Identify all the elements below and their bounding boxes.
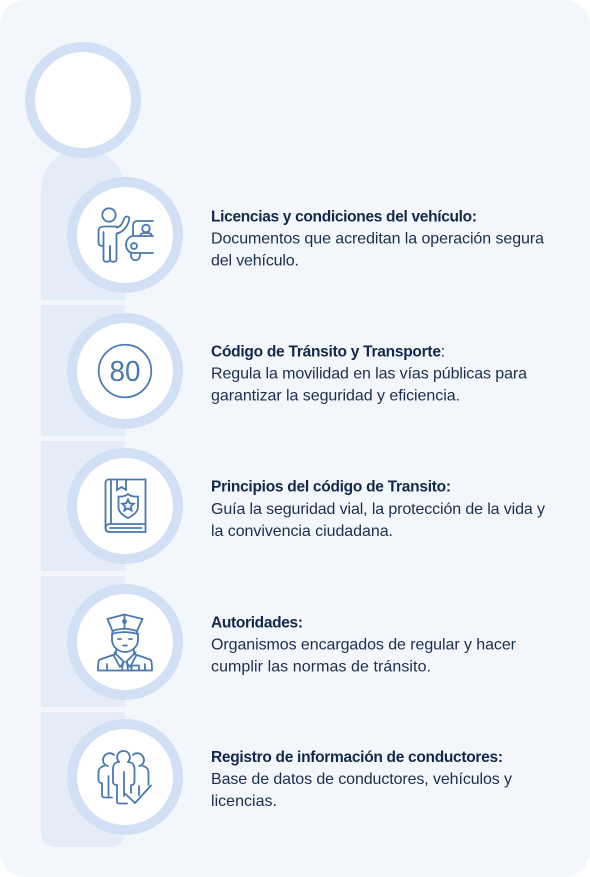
- description: licencias.: [211, 793, 277, 810]
- item 3: [72, 453, 545, 559]
- segment 5: [41, 712, 125, 847]
- description: Documentos que acreditan la operación segura: [211, 230, 544, 248]
- timeline column: [41, 148, 125, 847]
- heading: Código de Tránsito y Transporte:: [211, 344, 445, 360]
- item 3 text: [211, 479, 545, 540]
- icon: rule book with badge: [106, 480, 146, 532]
- item 4 text: [211, 615, 517, 676]
- description: garantizar la seguridad y eficiencia.: [211, 388, 460, 404]
- description: Base de datos de conductores, vehículos y: [211, 771, 512, 788]
- description: [211, 501, 545, 540]
- item 5 circle: [72, 724, 178, 830]
- top empty circle: [30, 47, 136, 153]
- description: Organismos encargados de regular y hacer: [211, 636, 517, 654]
- item 2 text: [211, 344, 527, 404]
- description: [211, 636, 517, 676]
- icon: police officer: [98, 614, 152, 670]
- item 3 circle: [72, 453, 178, 559]
- description: cumplir las normas de tránsito.: [211, 658, 431, 676]
- segment 4: [41, 576, 125, 707]
- description: [211, 366, 527, 404]
- item 5: [72, 724, 512, 830]
- icon: group of drivers with check: [98, 751, 151, 804]
- heading: Licencias y condiciones del vehículo:: [211, 208, 477, 226]
- description: Guía la seguridad vial, la protección de la vida y: [211, 501, 545, 518]
- segment 3: [41, 441, 125, 571]
- item 1 circle: [72, 182, 178, 288]
- item 4 circle: [72, 589, 178, 695]
- icon: speed limit 80: [99, 345, 151, 397]
- icon: speed limit 80: 80: [110, 356, 140, 388]
- heading: Principios del código de Transito:: [211, 479, 451, 496]
- description: [211, 230, 544, 270]
- item 2: [72, 318, 527, 424]
- heading: Registro de información de conductores:: [211, 749, 503, 766]
- item 1 text: [211, 208, 544, 270]
- description: la convivencia ciudadana.: [211, 523, 393, 540]
- item 1: [72, 182, 544, 288]
- description: Regula la movilidad en las vías públicas para: [211, 366, 527, 382]
- item 4: [72, 589, 517, 695]
- heading: Autoridades:: [211, 615, 303, 632]
- description: [211, 771, 512, 810]
- segment 2: [41, 305, 125, 436]
- icon: officer signalling a car: [98, 208, 153, 262]
- description: del vehículo.: [211, 252, 299, 270]
- item 5 text: [211, 749, 512, 810]
- segment 1: [41, 148, 125, 300]
- item 2 circle: [72, 318, 178, 424]
